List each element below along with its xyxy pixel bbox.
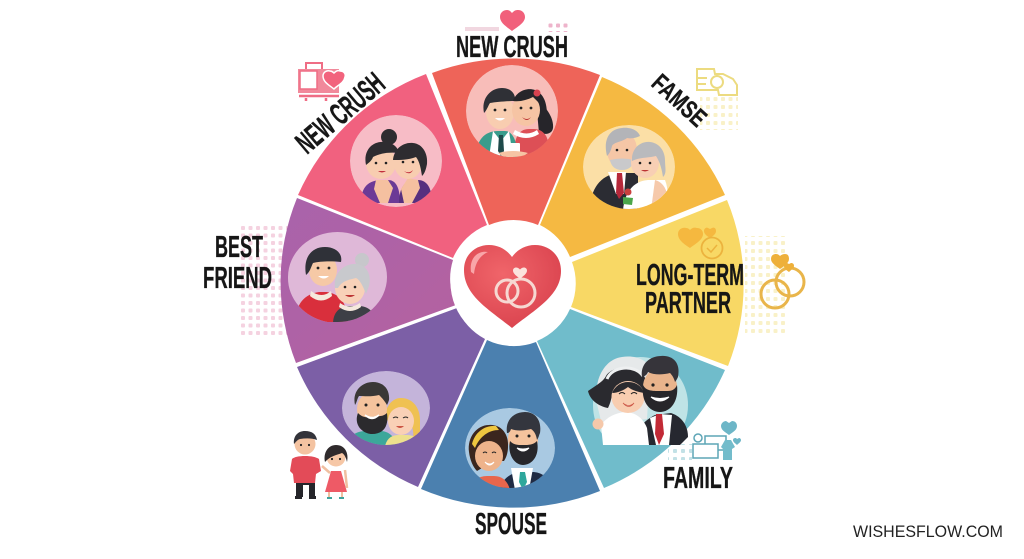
icon: hearts and check badge [678,228,722,258]
decorative dots: left [238,226,288,336]
icon: heart top [465,10,525,31]
segment: family [537,309,725,488]
segment: famse [540,77,725,257]
label: long-term partner [636,257,744,320]
centre disc with heart and rings [450,221,574,344]
icon: suitcase and heart [298,63,345,101]
label: long-term partner: PARTNER [645,285,731,320]
illustration: two children [290,431,348,499]
segment: best friend [281,198,456,363]
portrait: couple on red [466,65,558,157]
decorative dots: family [668,444,692,460]
label: best friend: FRIEND [203,260,272,295]
label: famse: FAMSE [646,69,712,133]
portrait: man and grandmother on mauve [288,232,387,322]
icon: gold rings [761,254,804,308]
decorative dots: top [545,20,569,32]
small heart on rings [513,267,527,279]
segment: long-term partner [571,200,744,366]
segment: new crush left [298,74,487,258]
heart highlight [471,252,488,274]
decorative dots: right [745,236,787,336]
label: new crush top: NEW CRUSH [456,29,568,64]
icon: heart [464,245,561,328]
portrait: two women on pink [350,115,442,207]
segment: spouse [421,340,600,508]
icon: family outline [693,421,741,460]
label: best friend: BEST [215,229,263,264]
label: long-term partner: LONG-TERM [636,257,744,292]
label: new crush rotated: NEW CRUSH [289,66,391,160]
icon: camera outline [697,69,737,95]
decorative dots: famse [700,94,738,130]
label: family: FAMILY [663,460,733,495]
segment: new crush top [432,59,600,225]
label: spouse: SPOUSE [475,506,547,541]
panel: relationship wheel [281,59,744,508]
icon: wedding rings [496,279,535,307]
portrait: wedding couple on teal [588,356,688,445]
portrait: elderly couple on orange [583,125,675,210]
watermark: WISHESFLOW.COM [853,522,1003,541]
label: best friend [203,229,272,295]
portrait: couple on blue [465,408,555,490]
portrait: bearded man and blonde woman on violet [342,371,430,446]
segment: unlabelled violet [297,308,485,487]
rings hearts [771,254,794,272]
